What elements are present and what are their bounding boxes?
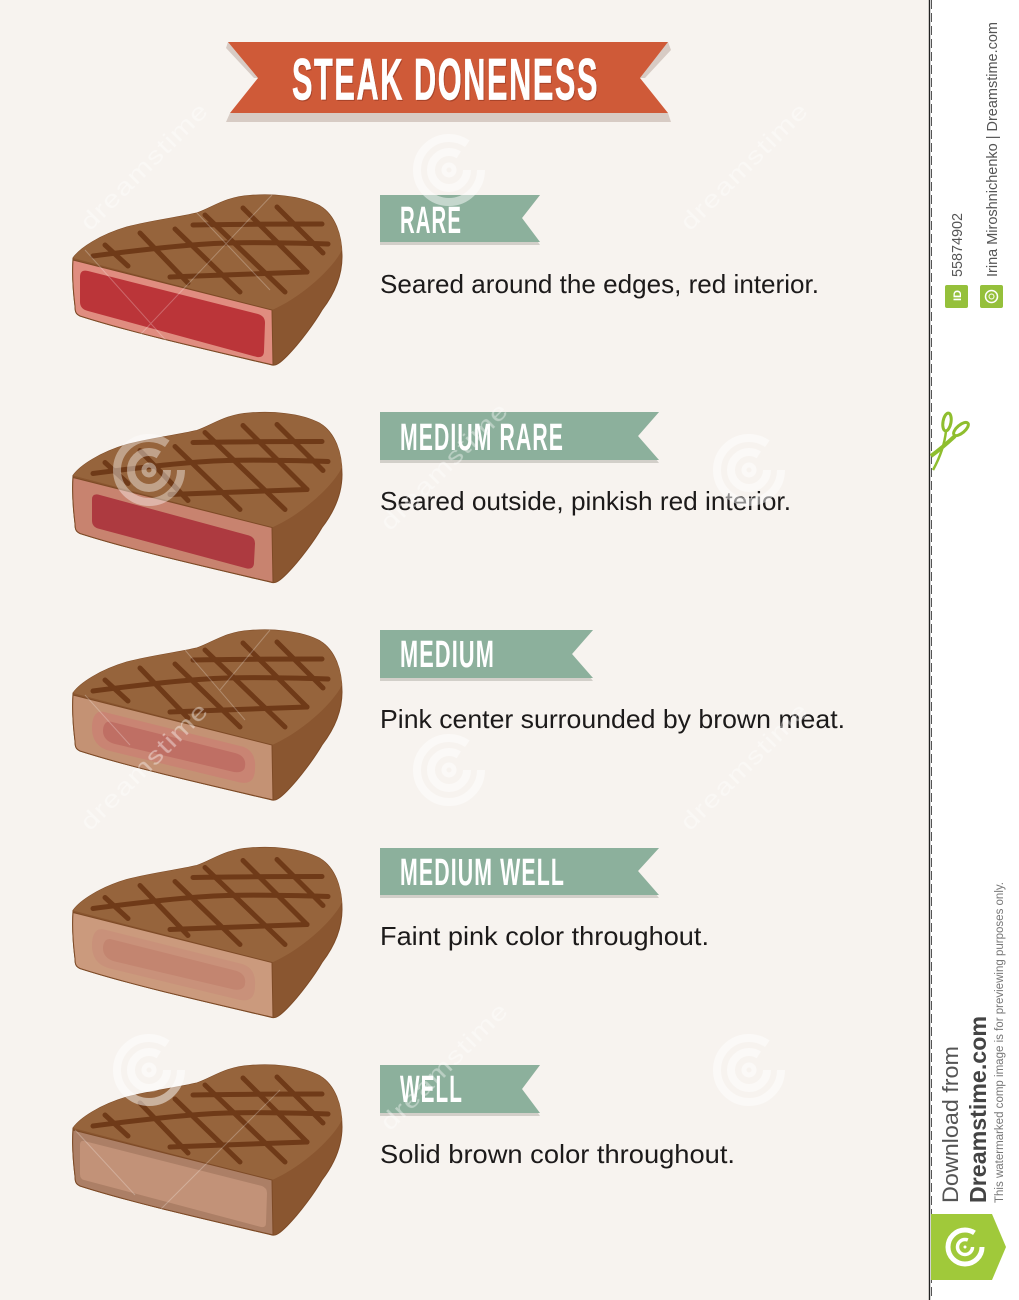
- watermark overlay: dreamstime: [375, 397, 514, 536]
- title: STEAK DONENESS: [292, 48, 599, 112]
- description: medium: Pink center surrounded by brown meat.: [380, 704, 845, 734]
- icon: copyright badge: [980, 285, 1003, 308]
- steak: medium: [73, 630, 342, 800]
- ribbon: medium rare: MEDIUM RARE: [400, 417, 564, 459]
- watermark overlay: dreamstime: [675, 97, 814, 236]
- image id: 55874902: [950, 213, 966, 277]
- watermark overlay: dreamstime: [75, 97, 214, 236]
- ribbon: well: [380, 1065, 540, 1116]
- author credit: Irina Miroshnichenko | Dreamstime.com: [985, 22, 1001, 277]
- cut face: medium rare: [73, 478, 273, 582]
- description: medium well: Faint pink color throughout.: [380, 921, 709, 951]
- download from: Download from: [938, 1046, 963, 1203]
- steak: well: [73, 1065, 342, 1235]
- item: medium rare: [380, 412, 791, 516]
- description: medium rare: Seared outside, pinkish red interior.: [380, 486, 791, 516]
- title ribbon: STEAK DONENESS: [293, 49, 600, 114]
- icon: id badge: ID: [952, 290, 964, 301]
- ribbon: rare: [380, 195, 540, 245]
- dreamstime brand: Dreamstime.com: [965, 1016, 991, 1203]
- watermark overlay: dreamstime: [75, 697, 214, 836]
- logo tag: [931, 1214, 1006, 1280]
- item: rare: [380, 195, 819, 299]
- ribbon: medium well: MEDIUM WELL: [400, 852, 565, 894]
- icon: id badge: [945, 285, 968, 308]
- cut face: well: [73, 1130, 273, 1235]
- item: well: [380, 1065, 735, 1169]
- description: well: Solid brown color throughout.: [380, 1139, 735, 1169]
- title ribbon: [226, 42, 671, 122]
- cut face: rare: [73, 260, 273, 365]
- ribbon: medium: [380, 630, 593, 681]
- item: medium: [380, 630, 845, 734]
- description: rare: Seared around the edges, red interior.: [380, 269, 819, 299]
- cut face: medium: [73, 695, 273, 800]
- watermark overlay: [75, 97, 814, 1210]
- item: medium well: [380, 848, 709, 951]
- ribbon: well: WELL: [400, 1069, 463, 1111]
- steak: medium well: [73, 847, 342, 1018]
- watermark overlay: dreamstime: [375, 997, 514, 1136]
- steak: medium rare: [73, 412, 342, 583]
- cut face: medium well: [73, 912, 273, 1018]
- ribbon: medium: MEDIUM: [400, 634, 495, 676]
- steak: rare: [73, 195, 342, 365]
- watermark notice: This watermarked comp image is for previewing purposes only.: [994, 882, 1006, 1203]
- icon: scissors: [931, 412, 970, 470]
- ribbon: rare: RARE: [400, 200, 462, 242]
- sidebar: [930, 0, 1019, 1300]
- watermark overlay: dreamstime: [675, 697, 814, 836]
- ribbon: medium rare: [380, 412, 659, 463]
